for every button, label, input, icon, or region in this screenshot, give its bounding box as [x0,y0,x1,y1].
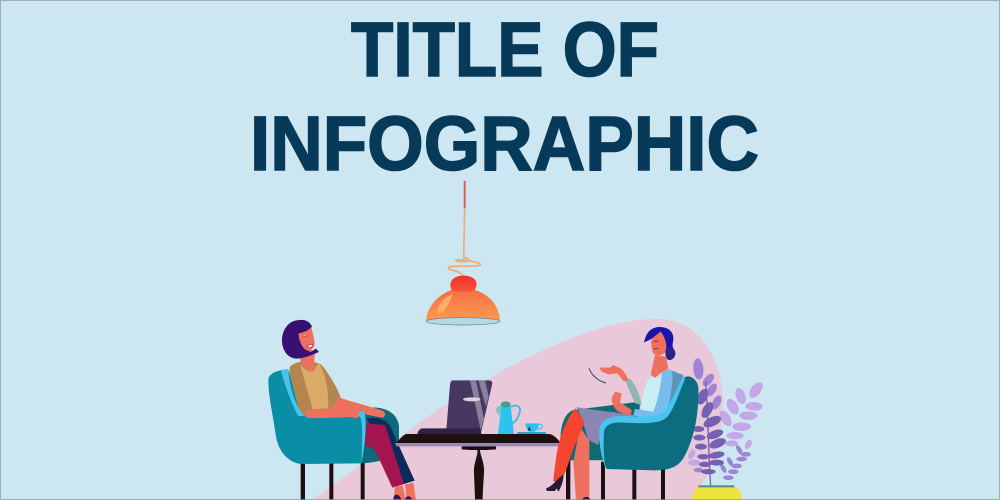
crossed leg [553,408,584,485]
table top [397,434,561,443]
face [298,326,315,351]
title: TITLE OF [351,7,659,93]
torso [289,361,341,418]
neck [300,347,315,372]
chair highlight [281,369,366,463]
skirt [577,407,635,445]
coffee table with laptop and tea set [395,380,562,500]
jacket [633,369,680,418]
plant pot [692,487,742,500]
chair legs [566,458,665,500]
neck and chest [651,355,668,378]
face details [654,341,658,349]
trousers [367,418,415,485]
right woman in armchair [546,327,765,500]
laptop [446,380,492,434]
chair body [601,376,698,470]
title [250,7,759,187]
face details [303,335,313,348]
shoe [546,474,563,492]
chair legs [301,463,365,500]
plant: mid leaves [692,358,751,480]
motion mark [589,368,606,383]
top [642,372,662,412]
hair bun [665,347,675,360]
far arm [332,397,385,417]
table pedestal [462,446,496,500]
feet [393,485,406,500]
near leg [573,427,589,500]
pink background blob [312,319,723,500]
hanging lamp [426,181,500,325]
left woman in armchair [268,320,416,500]
chair far side [560,402,640,460]
head [651,332,667,355]
chair far arm [362,407,399,463]
far arm and hand [625,378,642,405]
plant: dark leaves [692,382,727,486]
near arm [304,409,359,418]
cup and saucer [517,423,546,434]
hair [282,320,319,359]
teapot [496,401,520,434]
plant: light leaves [686,380,765,466]
near hand [612,392,632,416]
title: INFOGRAPHIC [250,101,759,187]
chair body [268,369,366,464]
chair highlight [599,376,685,468]
hair [644,327,673,352]
